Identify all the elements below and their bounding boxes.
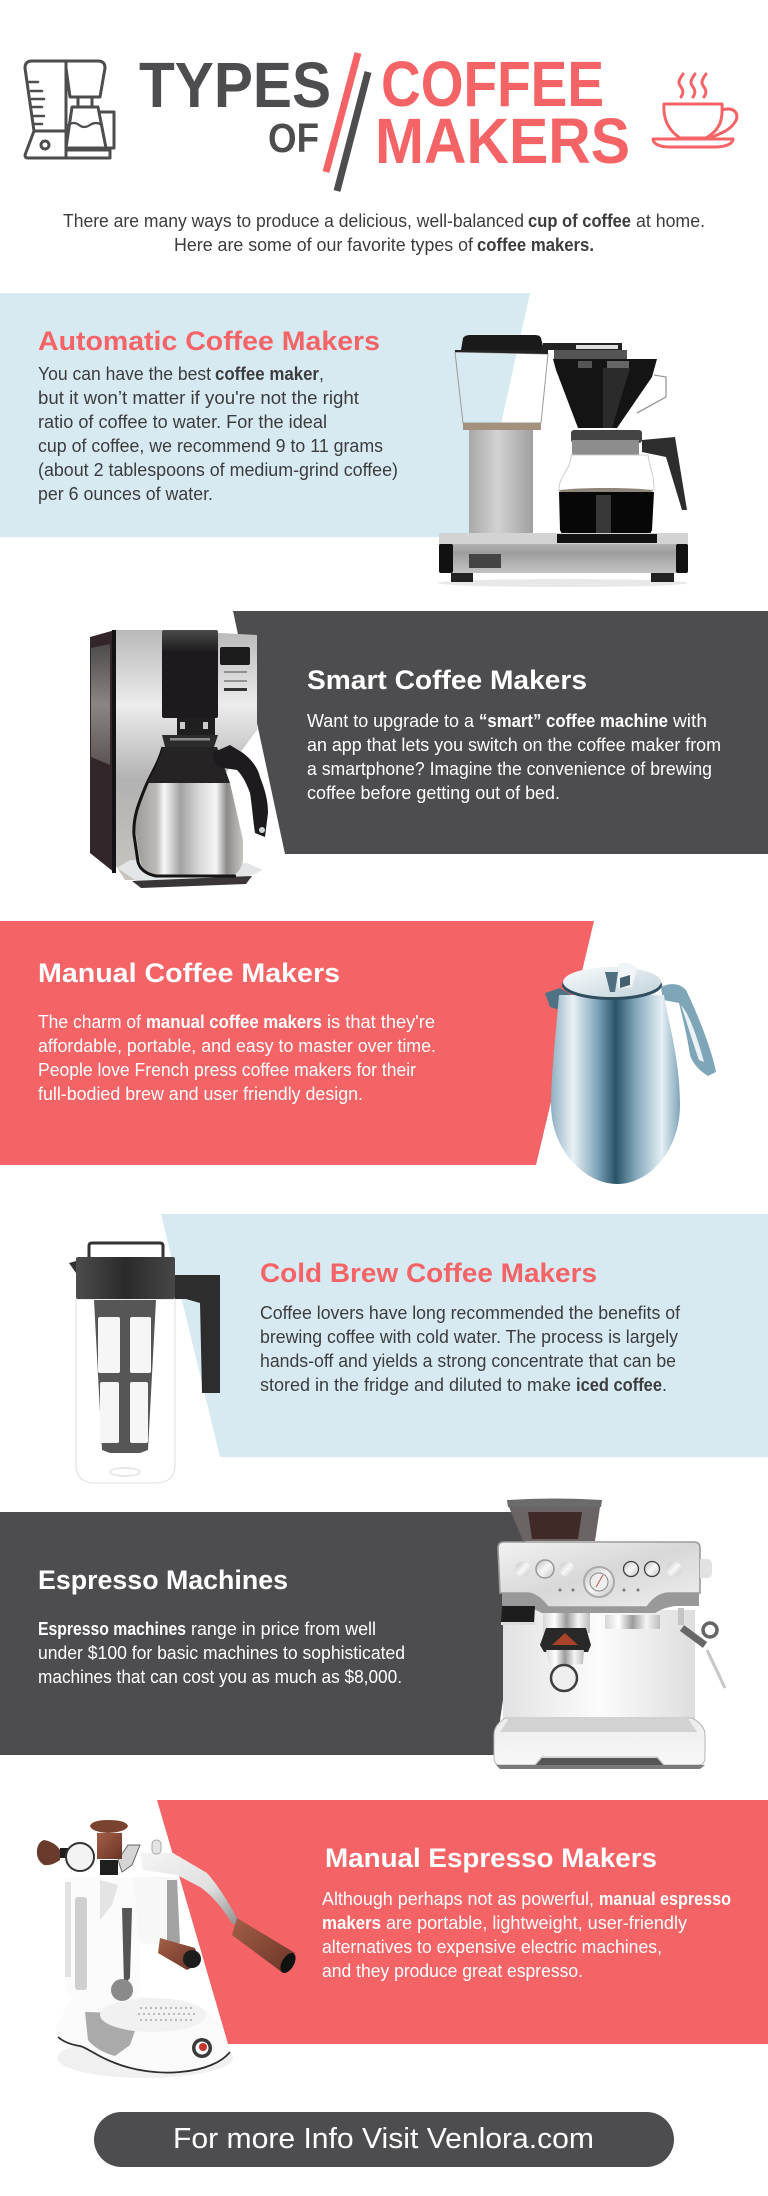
text block: affordable, portable, and easy to master over time.	[38, 1036, 436, 1056]
text block: People love French press coffee makers for their	[38, 1060, 416, 1080]
text block: Want to upgrade to a	[307, 711, 475, 731]
text block: manual coffee makers	[146, 1012, 322, 1032]
text block: Coffee lovers have long recommended the benefits of	[260, 1303, 681, 1323]
panel background	[157, 1800, 768, 2044]
footer link text: For more Info Visit Venlora.com	[173, 2123, 594, 2155]
text block: iced coffee	[576, 1375, 662, 1395]
text block: an app that lets you switch on the coffee maker from	[307, 735, 721, 755]
title word: types: TYPES	[139, 49, 331, 121]
title word: of: OF	[268, 115, 319, 161]
intro text: coffee makers.	[477, 235, 594, 255]
panel background	[0, 921, 594, 1165]
heading: Manual Coffee Makers	[38, 958, 340, 988]
panel: automatic coffee makers	[0, 293, 688, 587]
title word: coffee: COFFEE	[381, 48, 604, 120]
panel: manual espresso makers	[37, 1800, 768, 2078]
icon: manual lever espresso machine	[37, 1820, 299, 2078]
text block: makers	[322, 1913, 381, 1933]
heading: Smart Coffee Makers	[307, 665, 587, 695]
text block	[260, 1303, 681, 1395]
panel: smart coffee makers	[90, 611, 768, 888]
text block: Espresso machines	[38, 1619, 186, 1639]
text block: brewing coffee with cold water. The process is largely	[260, 1327, 678, 1347]
icon: espresso machine	[494, 1498, 725, 1769]
text block: and they produce great espresso.	[322, 1961, 583, 1981]
text block: (about 2 tablespoons of medium-grind coffee)	[38, 460, 398, 480]
text block: cup of coffee, we recommend 9 to 11 grams	[38, 436, 383, 456]
panel: espresso machines	[0, 1498, 725, 1769]
text block	[322, 1889, 731, 1981]
text block: “smart” coffee machine	[479, 711, 668, 731]
text block	[38, 364, 398, 504]
footer button	[94, 2112, 674, 2167]
icon: smart coffee machine	[90, 630, 268, 888]
intro text: at home.	[636, 211, 705, 231]
heading: Manual Espresso Makers	[325, 1843, 657, 1873]
text block: is that they're	[327, 1012, 435, 1032]
panel background	[0, 1512, 530, 1755]
text block: hands-off and yields a strong concentrate that can be	[260, 1351, 676, 1371]
panel background	[233, 611, 768, 854]
intro text	[63, 211, 705, 255]
text block: coffee maker	[215, 364, 319, 384]
text block: coffee before getting out of bed.	[307, 783, 560, 803]
text block	[38, 1619, 405, 1687]
intro text: Here are some of our favorite types of	[174, 235, 474, 255]
intro text: cup of coffee	[528, 211, 631, 231]
title word: makers: MAKERS	[375, 105, 630, 177]
title divider: red slash	[326, 53, 358, 172]
text block: are portable, lightweight, user-friendly	[386, 1913, 687, 1933]
text block: manual espresso	[599, 1889, 731, 1909]
text block: stored in the fridge and diluted to make	[260, 1375, 571, 1395]
text block: machines that can cost you as much as $8,000.	[38, 1667, 402, 1687]
text block: per 6 ounces of water.	[38, 484, 213, 504]
heading: Cold Brew Coffee Makers	[260, 1258, 597, 1288]
icon: french press	[545, 963, 716, 1184]
panel: manual coffee makers	[0, 921, 716, 1184]
icon: cold brew pitcher	[69, 1243, 220, 1483]
text block: but it won’t matter if you're not the right	[38, 388, 359, 408]
text block: ratio of coffee to water. For the ideal	[38, 412, 327, 432]
text block: ,	[319, 364, 324, 384]
text block: .	[662, 1375, 667, 1395]
text block	[38, 1012, 436, 1104]
text block: alternatives to expensive electric machines,	[322, 1937, 662, 1957]
panel: cold brew coffee makers	[69, 1214, 768, 1483]
text block: under $100 for basic machines to sophisticated	[38, 1643, 405, 1663]
panel background	[0, 293, 530, 537]
text block: a smartphone? Imagine the convenience of brewing	[307, 759, 712, 779]
icon: automatic drip machine	[438, 335, 688, 587]
icon: drip coffee maker	[25, 61, 114, 158]
header	[25, 48, 737, 255]
text block: with	[672, 711, 707, 731]
icon: coffee cup	[653, 74, 737, 147]
text block: Although perhaps not as powerful,	[322, 1889, 594, 1909]
heading: Espresso Machines	[38, 1565, 288, 1595]
text block: You can have the best	[38, 364, 211, 384]
intro text: There are many ways to produce a delicious, well-balanced	[63, 211, 524, 231]
heading: Automatic Coffee Makers	[38, 326, 380, 356]
panel background	[161, 1214, 768, 1457]
text block: The charm of	[38, 1012, 142, 1032]
text block: full-bodied brew and user friendly design.	[38, 1084, 363, 1104]
text block: range in price from well	[191, 1619, 376, 1639]
title divider: dark slash	[337, 72, 368, 191]
text block	[307, 711, 721, 803]
